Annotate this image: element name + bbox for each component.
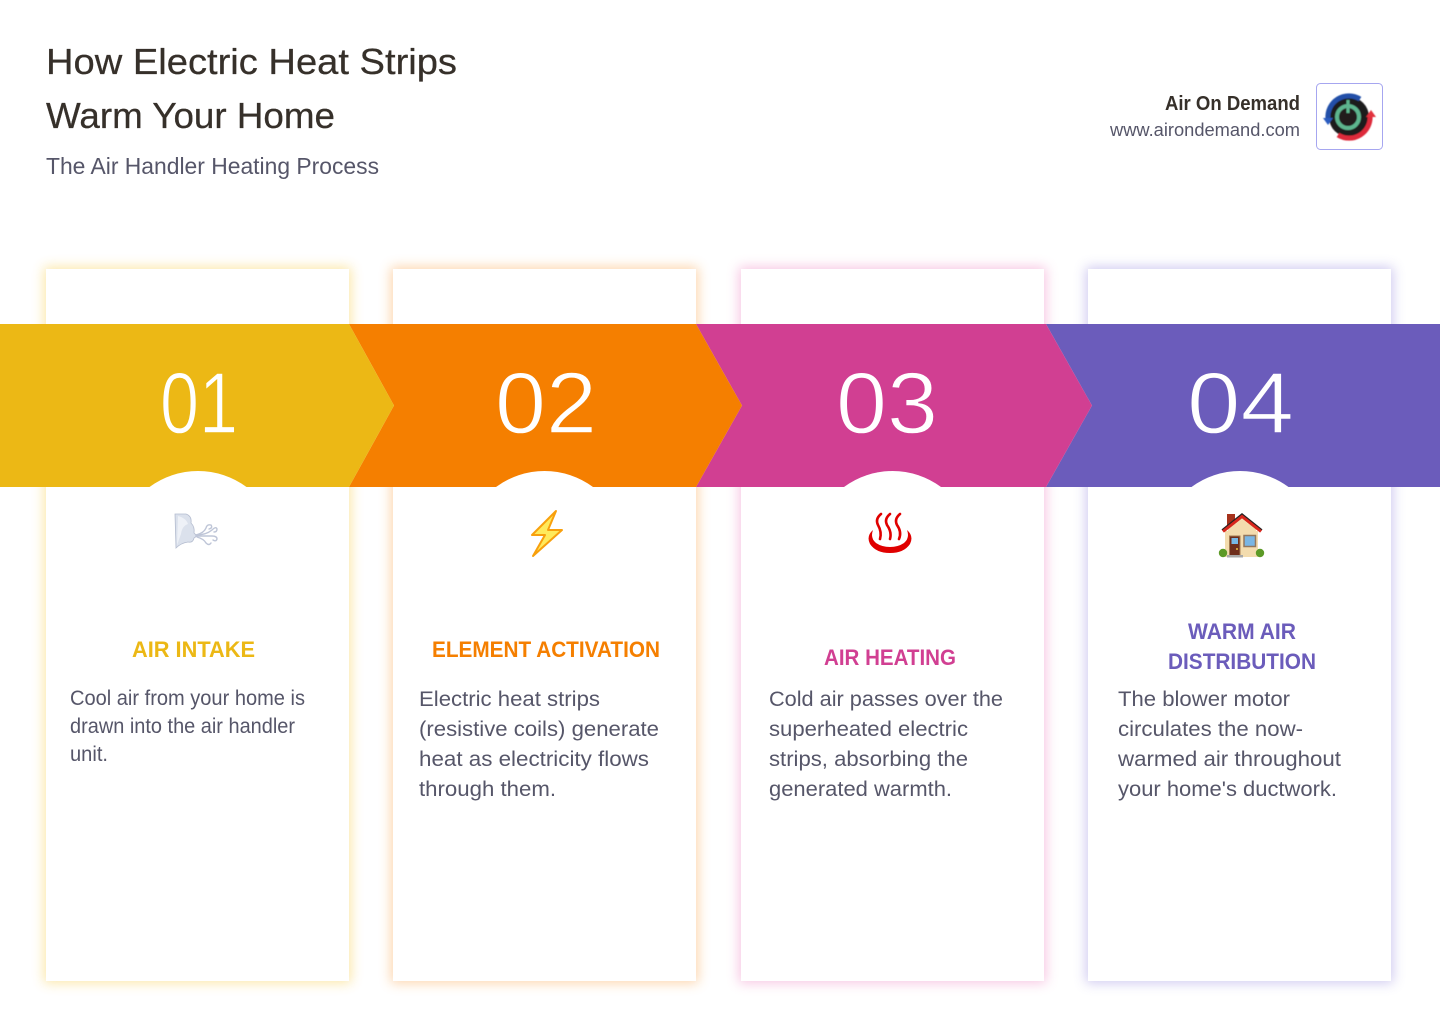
- panel: step 1 card: [44, 267, 351, 983]
- step 1 text: [70, 637, 305, 766]
- body text: unit.: [70, 742, 108, 766]
- heading: warm air distribution: WARM AIR: [1188, 619, 1296, 644]
- arrow: step 3 band: [696, 324, 1092, 487]
- body text: Electric heat strips: [419, 687, 600, 711]
- icon: wind face: [175, 514, 217, 548]
- heading: element activation: ELEMENT ACTIVATION: [432, 637, 660, 662]
- body text: Cool air from your home is: [70, 686, 305, 710]
- body text: drawn into the air handler: [70, 714, 295, 738]
- step 2 text: [419, 637, 660, 801]
- icon notch: step 4: [1192, 471, 1288, 487]
- icon notch: step 1: [150, 471, 246, 487]
- title: How Electric Heat Strips: [46, 41, 457, 82]
- number 02: 02: [495, 355, 597, 452]
- body text: heat as electricity flows: [419, 747, 649, 771]
- body text: [419, 687, 659, 801]
- icon notch: step 3: [844, 471, 941, 487]
- heading: warm air distribution: DISTRIBUTION: [1168, 649, 1316, 674]
- icon: lightning bolt: [532, 511, 562, 556]
- body text: Cold air passes over the: [769, 687, 1003, 711]
- number 03: 03: [836, 355, 938, 452]
- title: [46, 41, 457, 136]
- number 01: 01: [160, 355, 238, 452]
- body text: The blower motor: [1118, 687, 1290, 711]
- body text: [70, 686, 305, 766]
- header: title and subtitle: [46, 41, 457, 179]
- step 3 text: [769, 645, 1003, 801]
- body text: [769, 687, 1003, 801]
- body text: through them.: [419, 777, 556, 801]
- icon: brand logo: [1316, 84, 1382, 150]
- body text: (resistive coils) generate: [419, 717, 659, 741]
- icon notch: step 2: [496, 471, 593, 487]
- arrow: step 2 band: [349, 324, 742, 487]
- panel: step 2 card: [391, 267, 698, 983]
- subtitle: The Air Handler Heating Process: [46, 153, 379, 179]
- body text: warmed air throughout: [1117, 747, 1341, 771]
- heading: air heating: AIR HEATING: [824, 645, 956, 670]
- panel: step 4 card: [1086, 267, 1393, 983]
- panel: step 3 card: [739, 267, 1046, 983]
- arrow: step 4 band: [1046, 324, 1440, 487]
- body text: circulates the now-: [1118, 717, 1303, 741]
- body text: [1117, 687, 1341, 801]
- brand name: Air On Demand: [1165, 93, 1300, 115]
- icon: hot springs: [869, 514, 911, 553]
- icon: house: [1219, 514, 1264, 558]
- brand block: [1109, 84, 1382, 150]
- number 04: 04: [1187, 355, 1294, 452]
- body text: generated warmth.: [769, 777, 952, 801]
- brand url: www.airondemand.com: [1109, 119, 1300, 140]
- body text: strips, absorbing the: [769, 747, 968, 771]
- heading: warm air distribution: [1168, 619, 1316, 674]
- body text: your home's ductwork.: [1118, 777, 1337, 801]
- body text: superheated electric: [769, 717, 968, 741]
- heading: air intake: AIR INTAKE: [132, 637, 255, 662]
- title: Warm Your Home: [46, 95, 335, 136]
- arrow: step 1 band: [0, 324, 394, 487]
- step 4 text: [1117, 619, 1341, 801]
